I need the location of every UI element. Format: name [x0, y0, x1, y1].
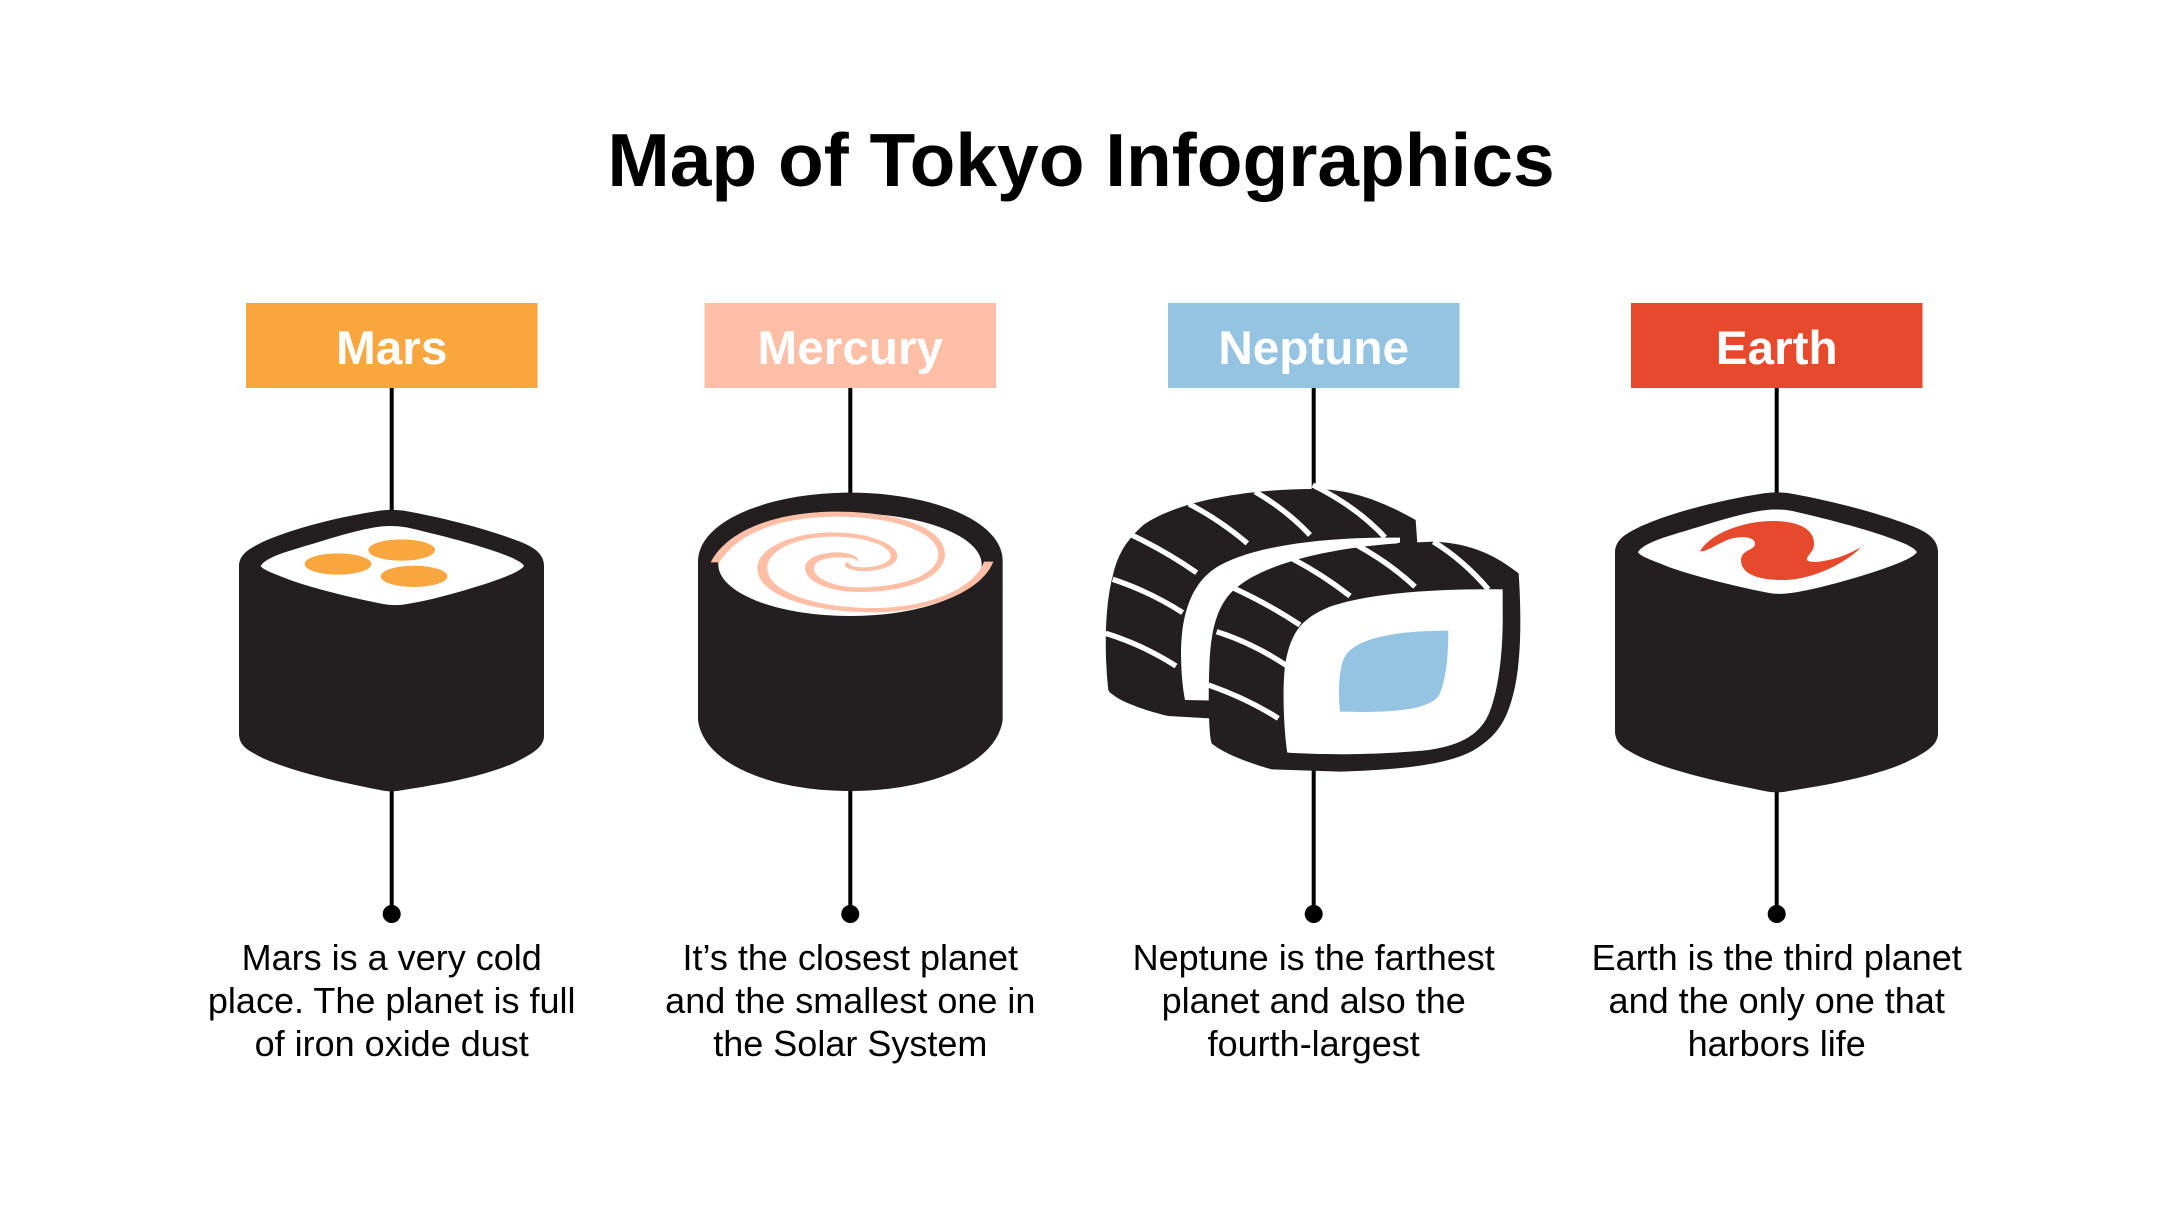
description: Neptune: fourth-largest — [1208, 1023, 1420, 1064]
description: Earth: harbors life — [1688, 1023, 1866, 1064]
label: Mercury — [704, 303, 996, 388]
icon: Earth sushi roll — [1615, 492, 1938, 792]
description: Earth: and the only one that — [1609, 980, 1945, 1021]
label: Mars — [246, 303, 538, 388]
icon: Mercury sushi roll — [698, 493, 1003, 791]
label: Mercury: Mercury — [758, 322, 944, 375]
description: Mars: place. The planet is full — [208, 980, 575, 1021]
description: Mars: Mars is a very cold — [242, 937, 542, 978]
description: Mercury: and the smallest one in — [665, 980, 1035, 1021]
panel: Neptune — [1106, 303, 1520, 1064]
label: Mars: Mars — [336, 322, 447, 375]
description: Earth: Earth is the third planet — [1592, 937, 1962, 978]
icon: Neptune sushi rolls — [1106, 485, 1520, 772]
description: Mars: of iron oxide dust — [255, 1023, 529, 1064]
description: Neptune: Neptune is the farthest — [1133, 937, 1495, 978]
description: Neptune: planet and also the — [1162, 980, 1466, 1021]
connector line: Neptune — [1305, 388, 1323, 923]
icon: Mars sushi roll — [239, 510, 544, 791]
description: Mercury: the Solar System — [713, 1023, 987, 1064]
panel: Earth — [1592, 303, 1962, 1064]
connector line: Mars — [383, 388, 401, 923]
title: Map of Tokyo Infographics — [607, 118, 1555, 202]
panel: Mars — [208, 303, 575, 1064]
label: Neptune: Neptune — [1218, 322, 1409, 375]
description: Mercury: It’s the closest planet — [683, 937, 1018, 978]
panel: Mercury — [665, 303, 1035, 1064]
connector line: Earth — [1768, 388, 1786, 923]
label: Earth: Earth — [1716, 322, 1838, 375]
label: Earth — [1631, 303, 1922, 388]
connector line: Mercury — [841, 388, 859, 923]
label: Neptune — [1168, 303, 1460, 388]
